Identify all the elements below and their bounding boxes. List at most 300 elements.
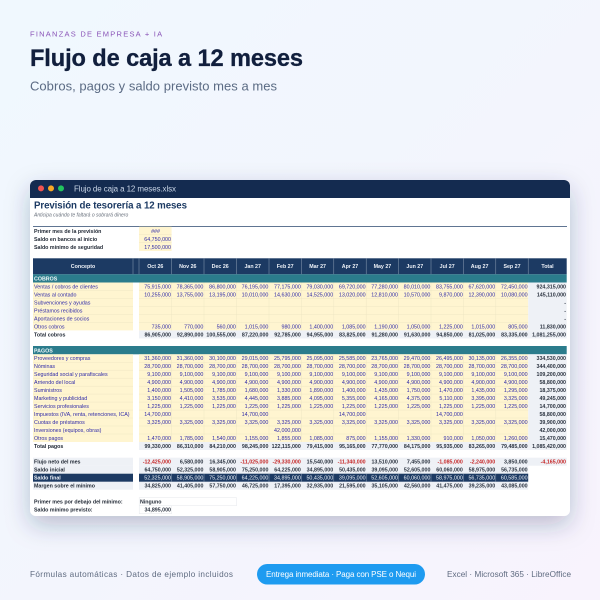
section: pagos: 9,100,000 bbox=[374, 372, 398, 378]
parameters block: 17,500,000 bbox=[144, 245, 171, 251]
title: Flujo de caja a 12 meses bbox=[30, 46, 303, 72]
section: saldos: -11,340,000 bbox=[338, 460, 366, 466]
section: pagos: 4,900,000 bbox=[407, 380, 430, 386]
section: saldos: 34,895,000 bbox=[307, 468, 333, 474]
section: pagos: 1,855,000 bbox=[277, 436, 301, 442]
section: pagos: 30,135,000 bbox=[468, 356, 495, 362]
section: saldos: Margen sobre el mínimo bbox=[34, 484, 96, 490]
section: pagos: 9,100,000 bbox=[245, 372, 268, 378]
parameters block: Saldo mínimo de seguridad bbox=[34, 245, 103, 251]
section: pagos: 1,295,000 bbox=[504, 388, 528, 394]
parameters block: ### bbox=[151, 229, 160, 235]
section: pagos: 1,225,000 bbox=[245, 404, 268, 410]
section: cobros: 1,190,000 bbox=[374, 324, 398, 330]
section: pagos: 1,330,000 bbox=[277, 388, 301, 394]
section: pagos: 3,325,000 bbox=[342, 420, 366, 426]
section: pagos: 1,225,000 bbox=[180, 404, 203, 410]
section: pagos: 875,000 bbox=[346, 436, 366, 442]
footer note: right: Excel · Microsoft 365 · LibreOffice bbox=[447, 570, 571, 579]
section: saldos: 41,405,000 bbox=[177, 484, 203, 490]
section: pagos: 9,100,000 bbox=[439, 372, 463, 378]
summary block bbox=[34, 498, 236, 514]
section: pagos: Arriendo del local bbox=[34, 380, 75, 386]
section: cobros: 87,220,000 bbox=[242, 332, 268, 338]
section: pagos: 31,360,000 bbox=[177, 356, 203, 362]
section: pagos: 1,225,000 bbox=[374, 404, 398, 410]
section: pagos: Total pagos bbox=[34, 444, 63, 450]
section: pagos: 9,100,000 bbox=[212, 372, 236, 378]
section: pagos: 28,700,000 bbox=[468, 364, 495, 370]
summary block: Primer mes por debajo del mínimo: bbox=[34, 500, 123, 506]
section: saldos: 39,095,000 bbox=[339, 476, 366, 482]
section: pagos: 1,260,000 bbox=[504, 436, 528, 442]
section: pagos: Inversiones (equipos, obras) bbox=[34, 428, 102, 434]
section: cobros: 86,905,000 bbox=[144, 332, 171, 338]
section: cobros: 1,015,000 bbox=[245, 324, 268, 330]
section: cobros: 79,030,000 bbox=[306, 285, 333, 291]
summary block: Saldo mínimo previsto: bbox=[34, 508, 93, 514]
section: pagos: 77,770,000 bbox=[371, 444, 398, 450]
section: pagos: 99,330,000 bbox=[144, 444, 171, 450]
summary block: 34,895,000 bbox=[144, 508, 171, 514]
section: pagos: 9,100,000 bbox=[504, 372, 528, 378]
table header: May 27 bbox=[374, 264, 391, 270]
section: pagos: 9,100,000 bbox=[277, 372, 301, 378]
section: pagos: 1,225,000 bbox=[212, 404, 236, 410]
section: cobros: 91,630,000 bbox=[404, 332, 430, 338]
section: cobros: 560,000 bbox=[217, 324, 236, 330]
section: pagos: 30,100,000 bbox=[209, 356, 236, 362]
section: cobros: 13,020,000 bbox=[339, 293, 366, 299]
section: saldos: 34,825,000 bbox=[144, 484, 171, 490]
section: cobros: 67,620,000 bbox=[468, 285, 495, 291]
section: pagos: 3,325,000 bbox=[439, 420, 463, 426]
section: cobros: 10,255,000 bbox=[144, 293, 171, 299]
section: saldos: 75,250,000 bbox=[242, 468, 268, 474]
section: pagos: 28,700,000 bbox=[306, 364, 333, 370]
section: pagos: 334,530,000 bbox=[537, 356, 566, 362]
section: pagos: 28,700,000 bbox=[501, 364, 528, 370]
section: saldos: 6,580,000 bbox=[180, 460, 203, 466]
section: pagos: 1,890,000 bbox=[309, 388, 333, 394]
section: cobros: 72,450,000 bbox=[501, 285, 528, 291]
section: pagos: PAGOS bbox=[34, 348, 53, 354]
section: pagos: 4,900,000 bbox=[374, 380, 398, 386]
section: pagos: 1,470,000 bbox=[147, 436, 171, 442]
section: pagos: Otros pagos bbox=[34, 436, 63, 442]
section: cobros: 83,825,000 bbox=[339, 332, 366, 338]
section: cobros: 80,010,000 bbox=[404, 285, 430, 291]
section: pagos: 14,700,000 bbox=[539, 404, 566, 410]
section: cobros: - bbox=[564, 316, 566, 322]
section: cobros: 92,890,000 bbox=[177, 332, 203, 338]
section: saldos: Flujo neto del mes bbox=[34, 460, 81, 466]
section: pagos: 1,400,000 bbox=[147, 388, 171, 394]
section: saldos: 58,975,000 bbox=[469, 468, 495, 474]
eyebrow: FINANZAS DE EMPRESA + IA bbox=[30, 30, 165, 38]
section: saldos: 39,095,000 bbox=[371, 468, 398, 474]
section: cobros: 77,280,000 bbox=[371, 285, 398, 291]
section: cobros: 77,175,000 bbox=[274, 285, 301, 291]
section: cobros: - bbox=[564, 300, 566, 306]
section: cobros: 13,195,000 bbox=[209, 293, 236, 299]
section: cobros: 735,000 bbox=[152, 324, 171, 330]
subtitle: Cobros, pagos y saldo previsto mes a mes bbox=[30, 78, 278, 94]
section: pagos: 4,900,000 bbox=[180, 380, 203, 386]
section: cobros: 10,080,000 bbox=[501, 293, 528, 299]
section: cobros bbox=[33, 274, 567, 338]
table header: Aug 27 bbox=[471, 264, 488, 270]
section: pagos: 86,310,000 bbox=[177, 444, 203, 450]
window title bar bbox=[30, 180, 570, 198]
section: pagos: 98,245,000 bbox=[242, 444, 268, 450]
section: pagos: 28,700,000 bbox=[177, 364, 203, 370]
section: cobros: Otros cobros bbox=[34, 324, 65, 330]
section: pagos: 5,110,000 bbox=[439, 396, 463, 402]
section: pagos: 3,325,000 bbox=[245, 420, 268, 426]
table header: Dec 26 bbox=[212, 264, 229, 270]
section: cobros: 1,081,255,000 bbox=[532, 332, 566, 338]
section: pagos: 4,900,000 bbox=[147, 380, 171, 386]
section: pagos: 1,750,000 bbox=[407, 388, 430, 394]
section: cobros: 9,870,000 bbox=[439, 293, 463, 299]
section: cobros: Ventas al contado bbox=[34, 293, 77, 299]
section: cobros: 1,085,000 bbox=[342, 324, 366, 330]
section: pagos: 3,325,000 bbox=[407, 420, 430, 426]
table header: Jul 27 bbox=[440, 264, 455, 270]
table header bbox=[33, 258, 567, 274]
call to action pill: Entrega inmediata · Paga con PSE o Nequi bbox=[266, 570, 416, 579]
table header: Concepto bbox=[71, 264, 96, 270]
section: pagos: 4,900,000 bbox=[342, 380, 366, 386]
section: pagos: 1,225,000 bbox=[277, 404, 301, 410]
section: pagos: Marketing y publicidad bbox=[34, 396, 87, 402]
section: pagos: 1,680,000 bbox=[245, 388, 268, 394]
section: pagos: Impuestos (IVA, renta, retenciones, ICA) bbox=[34, 412, 130, 418]
section: cobros: 76,195,000 bbox=[242, 285, 268, 291]
section: saldos: 64,225,000 bbox=[242, 476, 268, 482]
table header: Oct 26 bbox=[147, 264, 163, 270]
section: pagos: 9,100,000 bbox=[180, 372, 203, 378]
section: pagos: 28,700,000 bbox=[339, 364, 366, 370]
section: pagos: 4,410,000 bbox=[180, 396, 203, 402]
section: saldos: 56,735,000 bbox=[468, 476, 495, 482]
section: pagos: 4,095,000 bbox=[309, 396, 333, 402]
section: saldos: 15,540,000 bbox=[307, 460, 333, 466]
section: pagos: 95,935,000 bbox=[436, 444, 463, 450]
section: pagos: 42,000,000 bbox=[274, 428, 301, 434]
section: pagos: 4,445,000 bbox=[245, 396, 268, 402]
section: saldos: 17,395,000 bbox=[274, 484, 301, 490]
section: pagos: 1,225,000 bbox=[471, 404, 495, 410]
section: pagos: 3,325,000 bbox=[309, 420, 333, 426]
section: pagos: 3,325,000 bbox=[277, 420, 301, 426]
section: pagos: 39,900,000 bbox=[539, 420, 566, 426]
section: pagos: 28,700,000 bbox=[242, 364, 268, 370]
section: pagos: 122,115,000 bbox=[272, 444, 301, 450]
section: cobros: Total cobros bbox=[34, 332, 65, 338]
section: saldos: 60,060,000 bbox=[404, 476, 430, 482]
section: saldos: 64,225,000 bbox=[274, 468, 301, 474]
section: cobros: 83,755,000 bbox=[436, 285, 463, 291]
section: pagos: 109,200,000 bbox=[537, 372, 566, 378]
section: pagos: 4,900,000 bbox=[309, 380, 333, 386]
section: pagos: 9,100,000 bbox=[407, 372, 430, 378]
section: pagos: 28,700,000 bbox=[404, 364, 430, 370]
section: saldos: 60,585,000 bbox=[501, 476, 528, 482]
section: saldos: -2,240,000 bbox=[470, 460, 495, 466]
section: cobros: Aportaciones de socios bbox=[34, 316, 90, 322]
section: pagos: 3,885,000 bbox=[277, 396, 301, 402]
section: pagos: 9,100,000 bbox=[309, 372, 333, 378]
section: pagos: 1,470,000 bbox=[439, 388, 463, 394]
section: pagos: 1,085,000 bbox=[309, 436, 333, 442]
section: saldos: 52,605,000 bbox=[404, 468, 430, 474]
panel: spreadsheet window bbox=[30, 180, 570, 516]
section: cobros: 78,365,000 bbox=[177, 285, 203, 291]
section: pagos: 4,375,000 bbox=[407, 396, 430, 402]
section: cobros: 92,785,000 bbox=[274, 332, 301, 338]
section: pagos: 28,700,000 bbox=[371, 364, 398, 370]
section: pagos: 1,785,000 bbox=[212, 388, 236, 394]
table header: Nov 26 bbox=[179, 264, 197, 270]
sheet subtitle: Anticipa cuándo te faltará o sobrará dinero bbox=[33, 213, 128, 219]
section: cobros: 1,050,000 bbox=[407, 324, 430, 330]
section: cobros: 805,000 bbox=[508, 324, 528, 330]
section: cobros: 12,390,000 bbox=[468, 293, 495, 299]
summary block: Ninguno bbox=[140, 500, 162, 506]
section: saldos: -29,330,000 bbox=[273, 460, 301, 466]
section: cobros: 14,630,000 bbox=[274, 293, 301, 299]
section: pagos: Cuotas de préstamos bbox=[34, 420, 85, 426]
section: pagos: 1,505,000 bbox=[180, 388, 203, 394]
section: pagos: 25,795,000 bbox=[274, 356, 301, 362]
section: pagos: Seguridad social y parafiscales bbox=[34, 372, 108, 378]
section: pagos: 14,700,000 bbox=[144, 412, 171, 418]
section: pagos: 25,095,000 bbox=[306, 356, 333, 362]
section: saldos: 58,905,000 bbox=[209, 468, 236, 474]
section: pagos: 4,900,000 bbox=[439, 380, 463, 386]
section: pagos: 79,415,000 bbox=[307, 444, 333, 450]
section: cobros: 980,000 bbox=[281, 324, 301, 330]
parameters block bbox=[33, 226, 567, 251]
section: pagos: 95,165,000 bbox=[339, 444, 366, 450]
section: pagos: 29,470,000 bbox=[404, 356, 430, 362]
section: pagos: 9,100,000 bbox=[471, 372, 495, 378]
section: pagos: 3,325,000 bbox=[374, 420, 398, 426]
footer note: left: Fórmulas automáticas · Datos de ejemplo incluidos bbox=[30, 570, 233, 579]
section: pagos: 1,225,000 bbox=[309, 404, 333, 410]
section: pagos: 1,400,000 bbox=[342, 388, 366, 394]
section: pagos: 3,395,000 bbox=[471, 396, 495, 402]
section: pagos: Proveedores y compras bbox=[34, 356, 91, 362]
section: cobros: 770,000 bbox=[184, 324, 203, 330]
section: saldos: 52,325,000 bbox=[144, 476, 171, 482]
section: saldos: -12,425,000 bbox=[143, 460, 171, 466]
section: pagos: Suministros bbox=[34, 388, 62, 394]
section: saldos: 43,085,000 bbox=[501, 484, 528, 490]
section: pagos: 49,245,000 bbox=[539, 396, 566, 402]
section: saldos: 16,345,000 bbox=[209, 460, 236, 466]
parameters block: 64,750,000 bbox=[144, 237, 171, 243]
section: pagos: 29,015,000 bbox=[242, 356, 268, 362]
window title bar: Flujo de caja a 12 meses.xlsx bbox=[74, 184, 176, 193]
section: pagos: 4,900,000 bbox=[277, 380, 301, 386]
table header: Apr 27 bbox=[342, 264, 358, 270]
section: pagos: 15,470,000 bbox=[539, 436, 566, 442]
section: saldos: 56,735,000 bbox=[501, 468, 528, 474]
section: saldos: 52,325,000 bbox=[177, 468, 203, 474]
section: saldos: 52,605,000 bbox=[371, 476, 398, 482]
section: pagos: 26,495,000 bbox=[436, 356, 463, 362]
section: pagos: 3,325,000 bbox=[147, 420, 171, 426]
section: cobros: 86,800,000 bbox=[209, 285, 236, 291]
section: pagos: 1,435,000 bbox=[374, 388, 398, 394]
section: pagos: 1,785,000 bbox=[180, 436, 203, 442]
section: saldos: 50,435,000 bbox=[306, 476, 333, 482]
section: pagos: 14,700,000 bbox=[339, 412, 366, 418]
section: saldos: 39,235,000 bbox=[469, 484, 495, 490]
table header: Total bbox=[541, 264, 554, 270]
section: pagos: 1,225,000 bbox=[439, 404, 463, 410]
section: saldos: 60,060,000 bbox=[436, 468, 463, 474]
section: pagos: 84,210,000 bbox=[209, 444, 236, 450]
section: cobros: 10,570,000 bbox=[404, 293, 430, 299]
table header: Jan 27 bbox=[244, 264, 261, 270]
section: pagos: 14,700,000 bbox=[436, 412, 463, 418]
section: pagos: 3,325,000 bbox=[212, 420, 236, 426]
section: pagos: 4,900,000 bbox=[245, 380, 268, 386]
section: cobros: Ventas / cobros de clientes bbox=[34, 285, 98, 291]
section: saldos: -1,085,000 bbox=[437, 460, 463, 466]
section: saldos: Saldo inicial bbox=[34, 468, 65, 474]
section: pagos: 42,000,000 bbox=[539, 428, 566, 434]
section: pagos: 5,355,000 bbox=[342, 396, 366, 402]
table header: Feb 27 bbox=[277, 264, 294, 270]
table header: Mar 27 bbox=[309, 264, 326, 270]
section: saldos: 41,475,000 bbox=[436, 484, 463, 490]
section: pagos: 910,000 bbox=[443, 436, 463, 442]
section: pagos: Servicios profesionales bbox=[34, 404, 89, 410]
section: cobros: 1,015,000 bbox=[471, 324, 495, 330]
section: cobros: 100,555,000 bbox=[206, 332, 236, 338]
section: pagos: 18,375,000 bbox=[539, 388, 566, 394]
section: cobros: 145,110,000 bbox=[537, 293, 566, 299]
section: pagos: 3,535,000 bbox=[212, 396, 236, 402]
section: pagos: 28,700,000 bbox=[209, 364, 236, 370]
section: saldos: 13,510,000 bbox=[371, 460, 398, 466]
section: cobros: 75,915,000 bbox=[144, 285, 171, 291]
section: saldos: 58,905,000 bbox=[177, 476, 203, 482]
section: cobros: 12,810,000 bbox=[371, 293, 398, 299]
section: pagos bbox=[33, 346, 567, 450]
section: cobros: 91,280,000 bbox=[371, 332, 398, 338]
section: pagos: 1,085,420,000 bbox=[532, 444, 566, 450]
section: pagos: 1,225,000 bbox=[504, 404, 528, 410]
section: cobros: COBROS bbox=[34, 276, 58, 282]
section: cobros: 1,225,000 bbox=[439, 324, 463, 330]
section: pagos: 4,900,000 bbox=[504, 380, 528, 386]
section: pagos: Nóminas bbox=[34, 364, 55, 370]
section: saldos: 46,725,000 bbox=[242, 484, 268, 490]
section: pagos: 31,360,000 bbox=[144, 356, 171, 362]
section: saldos: 35,105,000 bbox=[371, 484, 398, 490]
section: pagos: 79,485,000 bbox=[501, 444, 528, 450]
section: pagos: 25,585,000 bbox=[339, 356, 366, 362]
section: cobros: Subvenciones y ayudas bbox=[34, 300, 91, 306]
section: cobros: 14,525,000 bbox=[306, 293, 333, 299]
section: pagos: 1,155,000 bbox=[374, 436, 398, 442]
section: saldos: 3,850,000 bbox=[504, 460, 528, 466]
section: cobros: 69,720,000 bbox=[339, 285, 366, 291]
section: pagos: 3,325,000 bbox=[504, 420, 528, 426]
section: saldos: 32,935,000 bbox=[307, 484, 333, 490]
section: cobros: 11,830,000 bbox=[540, 324, 566, 330]
section: cobros: 83,335,000 bbox=[501, 332, 528, 338]
section: pagos: 1,050,000 bbox=[471, 436, 495, 442]
section: cobros: 924,315,000 bbox=[537, 285, 566, 291]
section: pagos: 1,435,000 bbox=[471, 388, 495, 394]
section: cobros: 81,025,000 bbox=[469, 332, 495, 338]
section: pagos: 9,100,000 bbox=[342, 372, 366, 378]
parameters block: Saldo en bancos al inicio bbox=[34, 237, 98, 243]
section: cobros: - bbox=[564, 308, 566, 314]
section: cobros: 1,400,000 bbox=[309, 324, 333, 330]
section: pagos: 26,355,000 bbox=[501, 356, 528, 362]
section: pagos: 58,800,000 bbox=[539, 380, 566, 386]
call to action pill bbox=[257, 564, 425, 584]
section: saldos: 21,595,000 bbox=[339, 484, 366, 490]
section: pagos: 3,150,000 bbox=[147, 396, 171, 402]
section: pagos: 9,100,000 bbox=[147, 372, 171, 378]
section: pagos: 23,765,000 bbox=[371, 356, 398, 362]
section: saldos: -11,025,000 bbox=[240, 460, 268, 466]
section: saldos: Saldo final bbox=[34, 476, 61, 482]
section: pagos: 4,900,000 bbox=[212, 380, 236, 386]
section: saldos bbox=[33, 458, 567, 490]
section: pagos: 1,155,000 bbox=[245, 436, 268, 442]
section: saldos: 50,435,000 bbox=[339, 468, 366, 474]
section: pagos: 14,700,000 bbox=[242, 412, 268, 418]
section: pagos: 28,700,000 bbox=[436, 364, 463, 370]
section: pagos: 1,330,000 bbox=[407, 436, 430, 442]
section: pagos: 28,700,000 bbox=[274, 364, 301, 370]
section: cobros: 13,755,000 bbox=[177, 293, 203, 299]
section: saldos: 42,560,000 bbox=[404, 484, 430, 490]
section: pagos: 1,225,000 bbox=[342, 404, 366, 410]
parameters block: Primer mes de la previsión bbox=[34, 229, 101, 235]
table header: Sep 27 bbox=[503, 264, 521, 270]
table header: Jun 27 bbox=[406, 264, 423, 270]
section: pagos: 4,165,000 bbox=[374, 396, 398, 402]
section: pagos: 4,900,000 bbox=[471, 380, 495, 386]
section: cobros: Préstamos recibidos bbox=[34, 308, 83, 314]
section: pagos: 1,225,000 bbox=[407, 404, 430, 410]
section: saldos: 64,750,000 bbox=[144, 468, 171, 474]
section: pagos: 84,175,000 bbox=[404, 444, 430, 450]
sheet title: Previsión de tesorería a 12 meses bbox=[34, 200, 187, 212]
section: pagos: 3,325,000 bbox=[471, 420, 495, 426]
section: cobros: 94,850,000 bbox=[436, 332, 463, 338]
section: pagos: 3,325,000 bbox=[504, 396, 528, 402]
section: pagos: 28,700,000 bbox=[144, 364, 171, 370]
section: pagos: 58,800,000 bbox=[539, 412, 566, 418]
section: pagos: 1,540,000 bbox=[212, 436, 236, 442]
section: pagos: 1,225,000 bbox=[147, 404, 171, 410]
section: saldos: 7,455,000 bbox=[407, 460, 430, 466]
section: pagos: 83,265,000 bbox=[469, 444, 495, 450]
section: saldos: 75,250,000 bbox=[209, 476, 236, 482]
